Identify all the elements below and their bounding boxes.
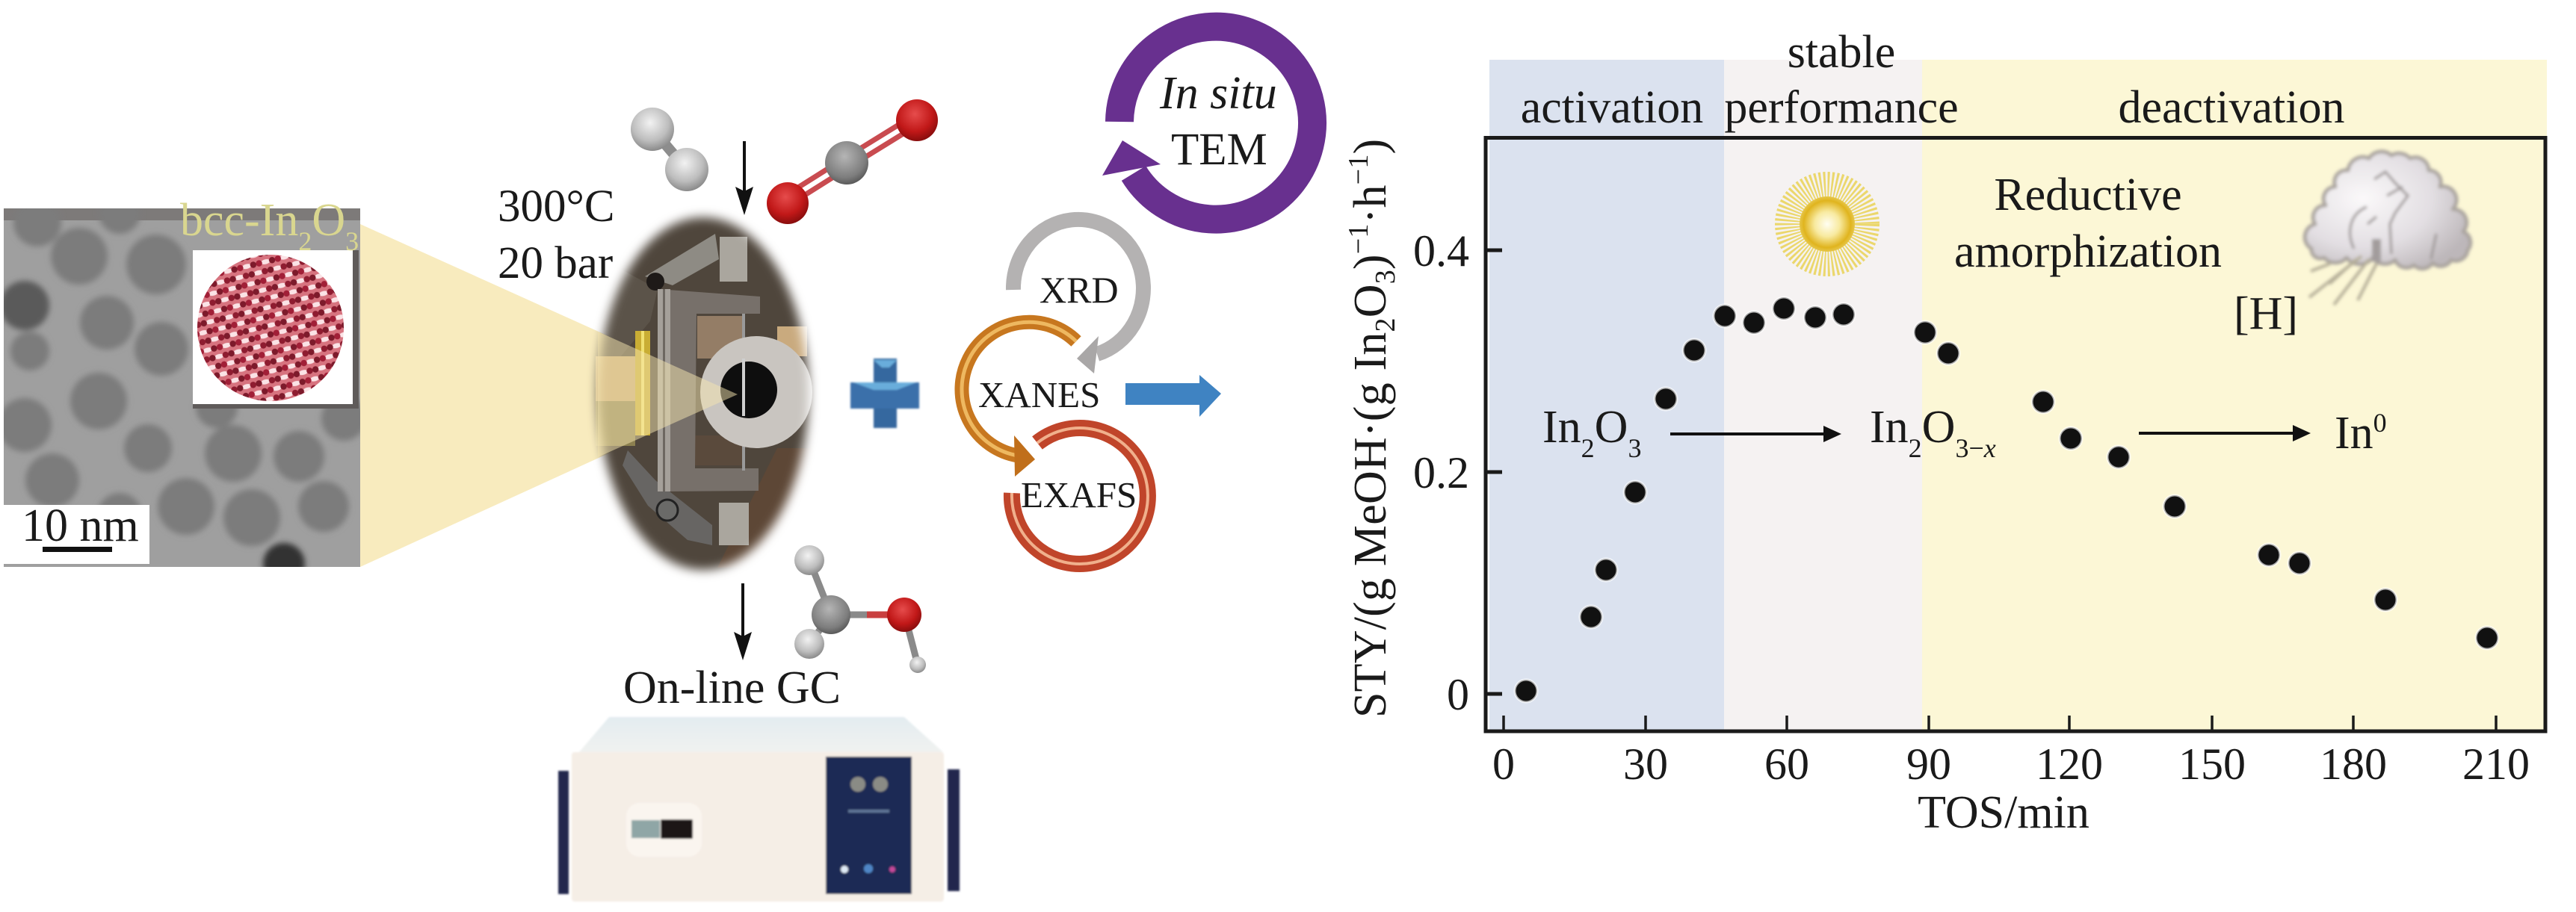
y axis tick labels [1413, 226, 1469, 719]
scale bar: 10 nm [22, 500, 139, 551]
label: XRD: XRD [1040, 269, 1119, 311]
phase label: activation: activation [1521, 82, 1703, 133]
phase label: In0: 0 [2373, 408, 2387, 438]
TEM background and particles [4, 208, 360, 567]
phase label: deactivation: deactivation [2119, 82, 2344, 133]
icon: on-line GC instrument [558, 717, 960, 902]
arrow: gas in [735, 141, 753, 215]
molecule: H2 [631, 108, 708, 191]
y axis tick labels: 0.4 [1413, 226, 1469, 276]
arrow: blue right arrow [1125, 375, 1221, 417]
x axis tick labels: 0 [1492, 739, 1515, 789]
icon: EXAFS red cycle arrow [1012, 428, 1148, 564]
phase label: stable performance [1724, 27, 1959, 133]
x axis ticks [1504, 716, 2496, 731]
phase label: In2O3: O [1595, 402, 1628, 453]
label: On-line GC: On-line GC [623, 663, 841, 713]
beam over holder [598, 332, 738, 457]
phase label: In2O3-x: 3−x [1955, 433, 1996, 463]
y axis title: −1 [1343, 154, 1374, 184]
y axis title: STY/(g MeOH·(g In [1345, 332, 1396, 718]
label: bcc-In2O3: 2 [298, 226, 312, 256]
arrow: In2O3 to In2O3-x [1670, 426, 1841, 442]
label: XANES: XANES [978, 374, 1100, 415]
icon: XRD grey cycle arrow [1013, 220, 1143, 373]
y axis title: −1 [1343, 223, 1374, 254]
label: bcc-In2O3: 3 [345, 226, 359, 256]
phase label: In2O3: 2 [1581, 433, 1595, 463]
label: bcc-In2O3: O [312, 195, 345, 246]
x axis tick labels: 30 [1623, 739, 1668, 789]
phase band: deactivation [1922, 60, 2547, 731]
x axis tick labels: 60 [1764, 739, 1809, 789]
data points [1515, 297, 2498, 702]
icon: In situ TEM purple cycle arrow [1102, 27, 1312, 220]
label: 20 bar: 20 bar [498, 238, 613, 288]
phase label: In0: In [2335, 408, 2373, 459]
label: Reductive amorphization [1954, 170, 2222, 277]
phase label: In2O3-x: O [1922, 402, 1955, 453]
arrow: In2O3-x to In0 [2139, 425, 2311, 441]
scale bar [4, 500, 149, 564]
phase label: stable performance: performance [1724, 82, 1959, 133]
x axis tick labels: 150 [2178, 739, 2246, 789]
phase label: In2O3-x: In [1870, 402, 1909, 453]
y axis title: 2 [1370, 317, 1401, 332]
phase label: In2O3: In [1542, 402, 1581, 453]
molecule: methanol [794, 545, 926, 673]
phase band: stable performance [1724, 60, 1922, 731]
y axis title: ) [1345, 254, 1396, 270]
x axis tick labels: 210 [2462, 739, 2530, 789]
icon: XANES orange cycle arrow [962, 322, 1076, 477]
chart: STY versus time on stream [1343, 27, 2547, 838]
holder photograph [590, 209, 817, 578]
label: EXAFS: EXAFS [1021, 474, 1137, 515]
phase label: stable performance: stable [1788, 27, 1895, 78]
label: In situ: In situ [1159, 68, 1277, 119]
label: Reductive amorphization: Reductive [1994, 170, 2182, 220]
label: [H]: [H] [2234, 288, 2298, 339]
x axis tick labels: 180 [2320, 739, 2387, 789]
arrow: product out [734, 583, 752, 660]
phase band: activation [1489, 60, 1724, 731]
x axis tick labels [1492, 739, 2530, 789]
x axis tick labels: 90 [1906, 739, 1951, 789]
x axis title: TOS/min [1918, 787, 2089, 838]
x axis tick labels: 120 [2036, 739, 2103, 789]
phase label: In2O3-x: 2 [1909, 433, 1922, 463]
y axis ticks [1486, 250, 1502, 694]
y axis title: O [1345, 284, 1396, 317]
icon: plus sign [850, 359, 919, 428]
light beam from micrograph, outside the holder [360, 224, 738, 567]
label: TEM: TEM [1171, 125, 1267, 175]
y axis tick labels: 0.2 [1413, 448, 1469, 497]
sample holder [590, 209, 817, 578]
y axis tick labels: 0 [1447, 670, 1469, 719]
y axis title: ) [1345, 139, 1396, 154]
label: 300 C: 300°C [498, 182, 615, 232]
label: bcc-In2O3: bcc-In [180, 195, 298, 246]
molecule: CO2 [767, 99, 938, 224]
icon: storm cloud with hydrogen rain [2305, 152, 2471, 305]
atomic model inset [193, 250, 359, 409]
label: Reductive amorphization: amorphization [1954, 226, 2222, 277]
y axis title: ·h [1345, 184, 1396, 223]
y axis title: 3 [1370, 270, 1401, 284]
plot frame [1486, 137, 2545, 731]
phase label: In2O3: 3 [1628, 433, 1641, 463]
icon: sun [1788, 184, 1867, 264]
panel: TEM micrograph of nanoparticles [0, 192, 366, 585]
